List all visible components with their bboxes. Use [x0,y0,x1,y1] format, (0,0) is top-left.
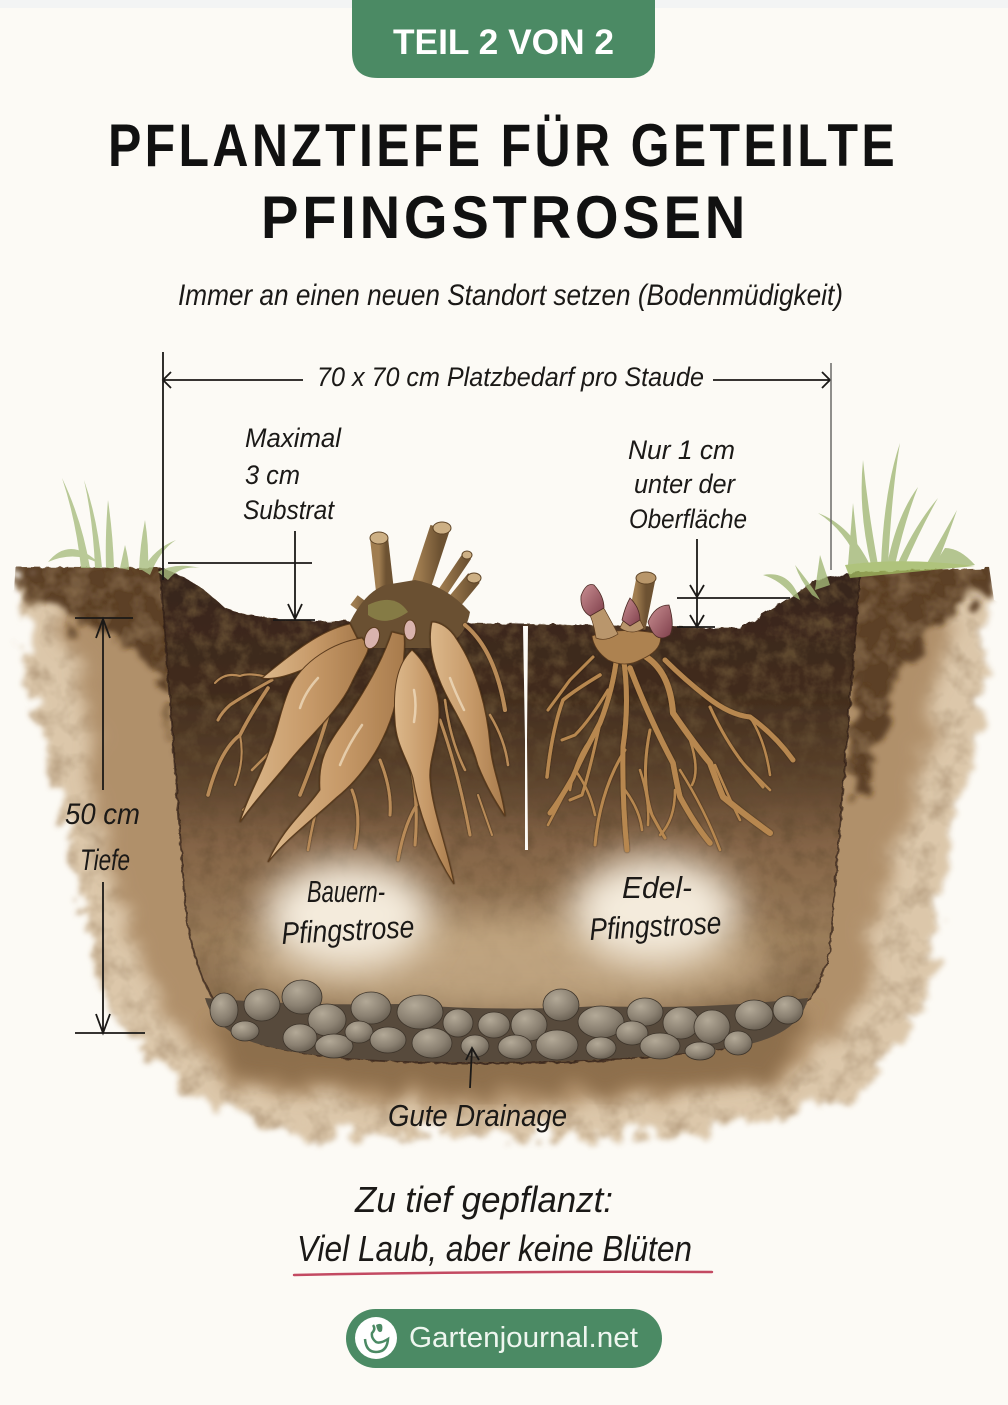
dimension: depth 50 cm [65,618,145,1033]
shaded wall band, left [10,545,175,760]
cleared air above the soil surface [0,500,1008,628]
stem [636,578,646,628]
shoots [586,604,644,639]
tuber buds [362,620,416,651]
lower soil shadow [200,1010,820,1092]
plant: Bauern-Pfingstrose tubers [208,522,508,884]
red underline [294,1272,712,1275]
title: PFINGSTROSEN [261,184,749,251]
lighter lower pit [235,915,775,1015]
outer soil, pale rim [22,570,985,1135]
label: Bauern-Pfingstrose: Bauern- [307,874,385,909]
crown [592,630,661,664]
stem caps [370,522,481,583]
label: Bauern-Pfingstrose [281,874,415,951]
pink buds [581,584,672,638]
label: Edel-Pfingstrose [589,870,722,947]
tuber highlights [300,678,464,765]
drainage stones [205,980,808,1062]
warning text [294,1179,712,1275]
footer badge: Gartenjournal.net [409,1322,638,1354]
stones [210,980,803,1060]
subtitle: Immer an einen neuen Standort setzen (Bodenmüdigkeit) [178,279,843,312]
label: Edel-Pfingstrose: Edel- [622,870,692,905]
footer badge [346,1309,662,1368]
grass right [763,443,975,600]
tubers [240,622,505,884]
warning text: Zu tief gepflanzt: [354,1179,613,1220]
soil cross-section [14,566,996,1149]
stems [354,528,474,612]
outer soil, wall tone [60,590,950,1110]
label halo left [264,861,432,969]
label: Bauern-Pfingstrose: Pfingstrose [281,909,415,951]
centre divider [523,626,528,850]
dimension: width 70 x 70 cm: 70 x 70 cm Platzbedarf pro Staude [317,362,704,392]
clean side margins beyond the soil top [0,560,1008,610]
shaded wall band, right [850,545,1000,800]
annotation: maximal 3 cm: Maximal [245,423,342,453]
annotation: maximal 3 cm: 3 cm [245,460,300,490]
title [108,112,898,251]
header badge: Teil 2 von 2 [352,0,655,78]
dimension: width 70 x 70 cm [163,352,831,580]
pit mottling [160,568,860,996]
gravel bed [205,998,808,1062]
fine roots [208,625,508,860]
logo icon [355,1317,397,1359]
pit outline [160,570,860,1063]
label halo right [571,856,739,964]
annotation: nur 1 cm: unter der [634,469,736,499]
label: Edel-Pfingstrose: Pfingstrose [589,905,722,947]
planting pit [160,568,860,1063]
header badge: Teil 2 von 2: TEIL 2 VON 2 [393,23,614,62]
annotation: nur 1 cm: Nur 1 cm [628,435,735,465]
annotation: gute Drainage [388,1048,567,1133]
root system [547,655,793,850]
annotation: maximal 3 cm [168,423,342,620]
dimension: depth 50 cm: Tiefe [80,844,130,877]
crown [350,580,470,648]
grass left [48,478,200,580]
annotation: maximal 3 cm: Substrat [243,495,335,525]
annotation: gute Drainage: Gute Drainage [388,1098,567,1133]
warning text: Viel Laub, aber keine Blüten [297,1228,692,1269]
annotation: nur 1 cm [628,435,790,627]
stem cap [636,572,656,584]
plant: Edel-Pfingstrose roots [547,572,793,850]
annotation: nur 1 cm: Oberfläche [629,504,747,534]
dimension: depth 50 cm: 50 cm [65,798,140,831]
